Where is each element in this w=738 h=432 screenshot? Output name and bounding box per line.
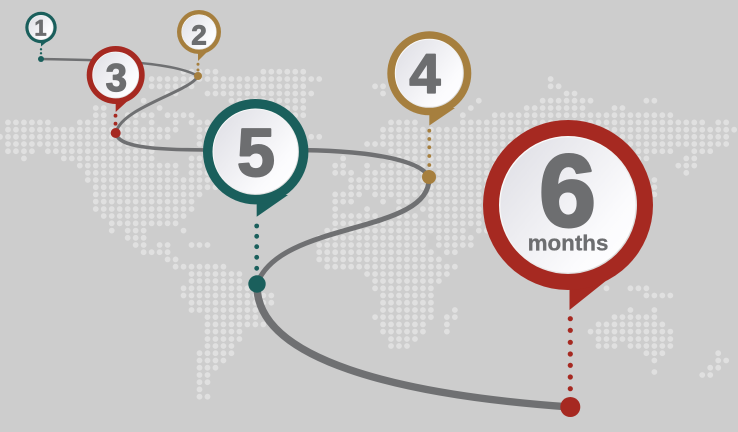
marker 2 [177, 10, 221, 80]
route line [41, 59, 570, 407]
number 5: 5 [237, 115, 275, 191]
marker 6 [483, 120, 653, 417]
marker 1 [25, 12, 57, 62]
marker 3 [87, 46, 145, 138]
dotted stem 4 [422, 129, 436, 184]
number 3: 3 [106, 57, 127, 100]
pin 1 [25, 12, 57, 47]
pin 5 [203, 99, 308, 217]
dotted stem 2 [194, 63, 202, 80]
pin 6 [483, 120, 653, 310]
number 2: 2 [191, 20, 207, 51]
dotted stem 6 [560, 316, 580, 417]
dotted stem 3 [111, 114, 121, 138]
number 1: 1 [34, 16, 47, 41]
pin 4 [387, 31, 471, 126]
marker 5 [203, 99, 308, 293]
pin 3 [87, 46, 145, 112]
dotted stem 5 [248, 224, 266, 293]
pin 2 [177, 10, 221, 61]
number 4: 4 [409, 42, 441, 105]
label: months: months [528, 231, 608, 256]
marker 4 [387, 31, 471, 184]
number 6: 6 [539, 134, 596, 248]
dotted stem 1 [38, 48, 44, 62]
dotted world map [0, 72, 735, 397]
